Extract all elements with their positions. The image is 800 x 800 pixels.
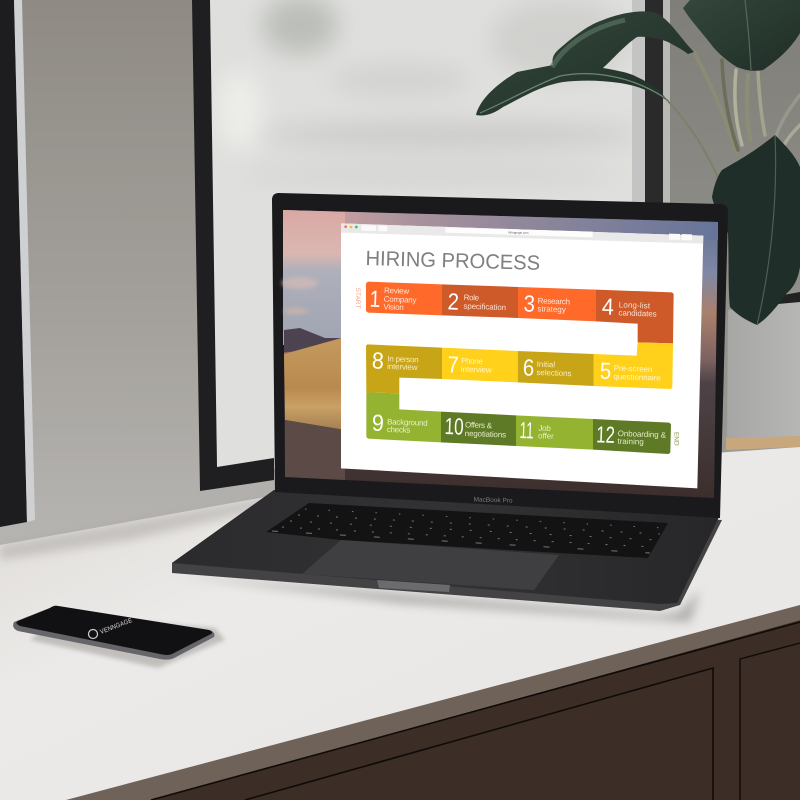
step 4: Long-list [619, 300, 651, 310]
desk shadow along the wall [0, 497, 280, 560]
keyboard [266, 503, 668, 558]
step 7: interview [461, 365, 492, 375]
leaf: drooping left [476, 11, 694, 116]
step 1: Vision [383, 302, 404, 312]
step 7: 7 [447, 351, 459, 378]
browser page [341, 223, 703, 488]
laptop base [172, 490, 722, 611]
laptop [172, 193, 728, 611]
front notch [377, 580, 450, 592]
browser window, drawn in 3x local coordinates [341, 223, 703, 488]
step 5: questionnaire [613, 372, 661, 383]
browser toolbar: hiringpage.com [508, 230, 529, 235]
step 8 [366, 344, 442, 393]
browser toolbar [341, 223, 703, 244]
step 8: 8 [371, 347, 384, 374]
step 6: Initial [537, 360, 555, 369]
step 3 [518, 287, 596, 321]
step 12: 12 [596, 421, 615, 448]
plant pot [726, 292, 800, 450]
step 12: training [617, 437, 644, 447]
step 4 [596, 290, 674, 343]
step 8: interview [387, 362, 418, 372]
phone logo [88, 617, 134, 638]
step 1: Review [384, 286, 409, 296]
window glass with blurred foliage [209, 0, 640, 480]
step 2: specification [463, 302, 506, 312]
phone [13, 606, 225, 668]
step 1: Company [384, 295, 417, 305]
step 10 [441, 412, 516, 446]
step 5: 5 [599, 358, 612, 384]
step 11: Job [538, 424, 551, 433]
step 6 [518, 351, 594, 386]
step 10: 10 [444, 413, 464, 440]
plant stems [667, 52, 800, 182]
leaf: upper right [683, 0, 800, 71]
step 5 [594, 342, 673, 389]
step 12: Onboarding & [618, 429, 667, 440]
step 9: 9 [371, 410, 384, 436]
title: HIRING PROCESS [365, 247, 540, 275]
leaf: large lower right [712, 135, 800, 325]
desk surface [0, 447, 800, 800]
step 3: strategy [537, 304, 566, 314]
step 9: checks [387, 425, 411, 435]
step 11: offer [538, 431, 554, 441]
step 11 [516, 415, 593, 450]
trackpad [302, 540, 559, 590]
laptop lid [272, 193, 728, 518]
end label: END [673, 432, 680, 446]
plant [476, 0, 800, 450]
window frame: centre [192, 0, 670, 491]
step 12 [593, 419, 671, 454]
window frame: left [0, 0, 35, 527]
step 8: In person [387, 354, 419, 364]
step 4: 4 [601, 293, 614, 320]
step 2 [442, 284, 518, 318]
step 1: 1 [369, 286, 381, 312]
step 9: Background [387, 417, 428, 428]
step 1 [366, 282, 442, 315]
start label: START [354, 288, 361, 308]
step 10: negotiations [465, 429, 506, 439]
step 2: Role [464, 293, 480, 303]
phone logo: VENNGAGE [99, 617, 134, 636]
step 2: 2 [447, 288, 459, 315]
step 6: selections [536, 368, 572, 378]
background wall [0, 0, 800, 560]
step 10: Offers & [465, 420, 493, 430]
laptop shadow [172, 575, 700, 622]
desktop wallpaper [282, 210, 718, 498]
step 3: 3 [523, 290, 535, 317]
step 11: 11 [519, 417, 534, 443]
step 7 [442, 348, 518, 382]
step 9 [366, 392, 441, 442]
desk front edge and cabinet [66, 605, 800, 800]
step 4: candidates [618, 308, 657, 319]
step 3: Research [538, 296, 570, 306]
step 5: Pre-screen [614, 364, 653, 374]
step 6: 6 [522, 354, 535, 381]
model name: MacBook Pro [473, 496, 513, 505]
step 7: Phone [461, 356, 483, 366]
